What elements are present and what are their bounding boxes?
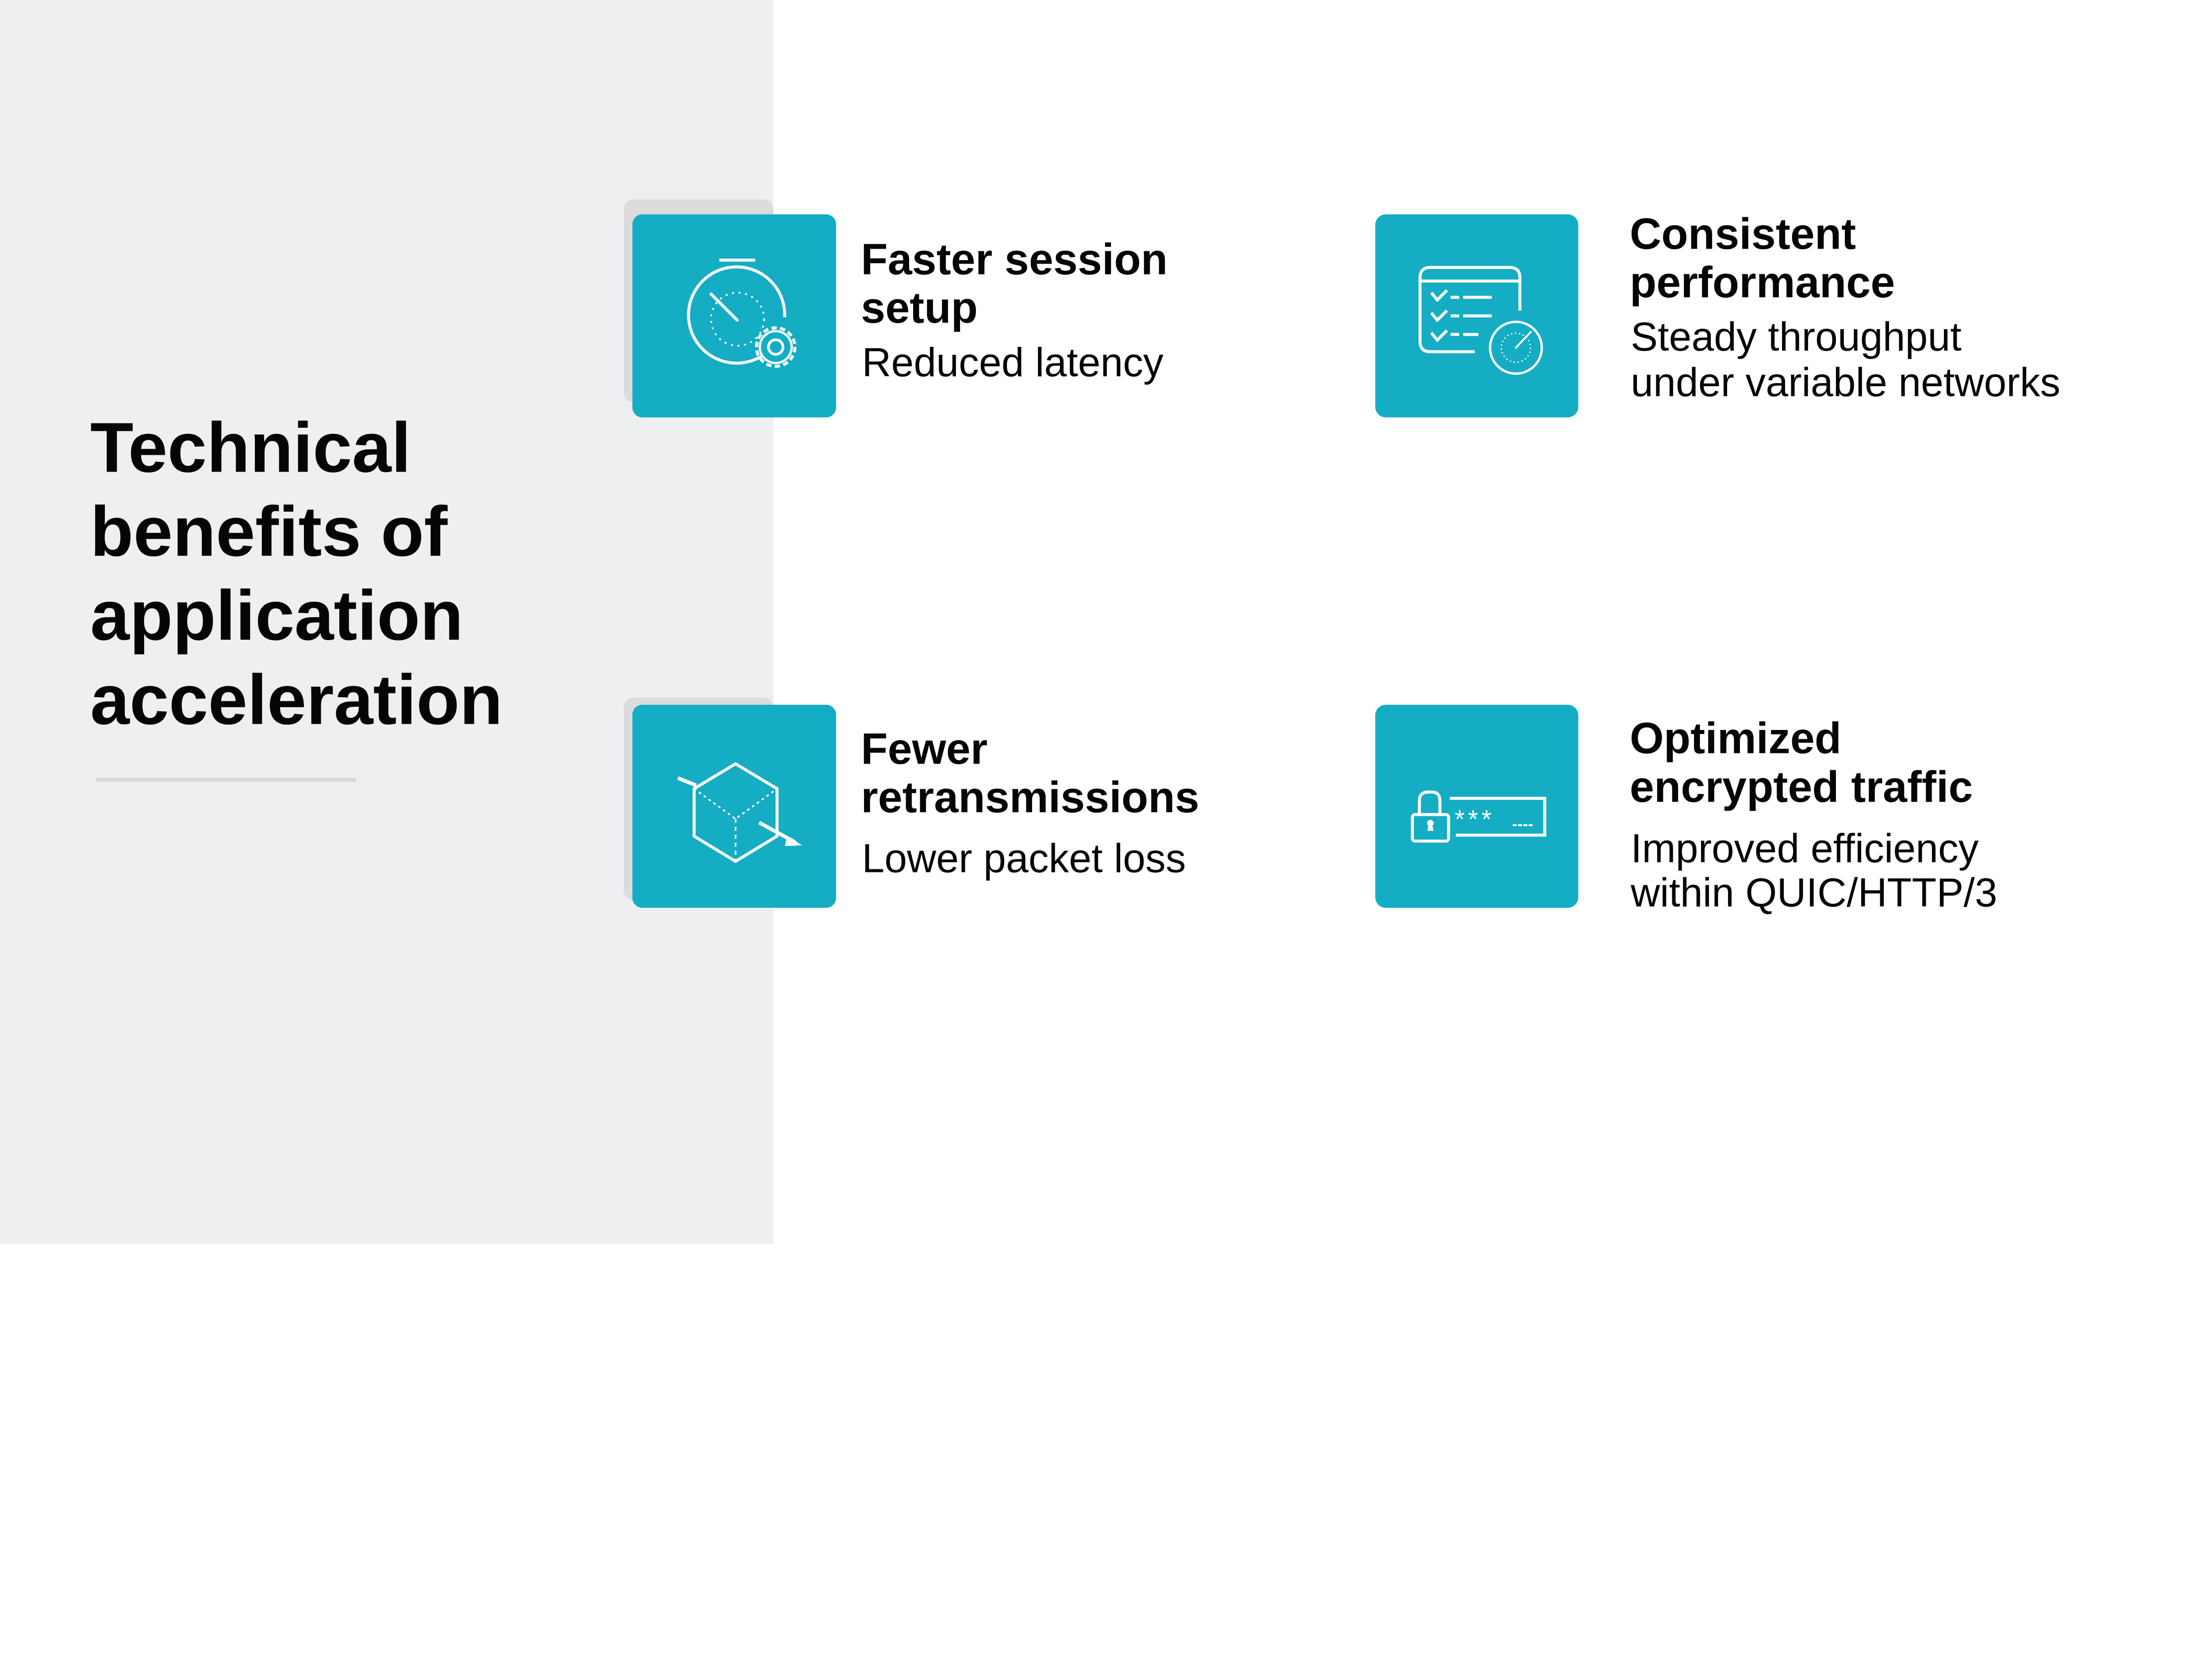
icon box: lock with password: ***	[1455, 805, 1495, 834]
card: optimized encrypted traffic	[1375, 705, 1997, 915]
heading and text: Improved efficiency	[1631, 826, 1979, 871]
heading and text	[1630, 209, 2060, 405]
icon box: checklist with gauge	[1375, 214, 1578, 418]
title: acceleration	[90, 660, 503, 739]
icon box: cube with arrow	[632, 705, 836, 908]
heading and text: Reduced latency	[862, 340, 1164, 385]
icon box: lock with password	[1375, 705, 1578, 908]
heading and text: Fewer	[861, 724, 987, 773]
icon box: stopwatch	[632, 214, 836, 418]
heading and text: Consistent	[1630, 209, 1856, 258]
title: benefits of	[90, 492, 448, 571]
title: application	[90, 576, 463, 655]
shadow 1	[624, 200, 773, 402]
heading and text	[861, 724, 1199, 881]
heading and text: Faster session	[861, 234, 1167, 284]
heading and text: Optimized	[1630, 713, 1841, 763]
title: Technical	[90, 407, 411, 487]
heading and text: retransmissions	[861, 772, 1199, 822]
shadow 3	[624, 697, 773, 900]
heading and text: Steady throughput	[1631, 315, 1962, 360]
heading and text: within QUIC/HTTP/3	[1630, 870, 1997, 915]
left panel background	[0, 0, 773, 1244]
heading and text: performance	[1630, 257, 1895, 307]
card: consistent performance	[1375, 209, 2060, 418]
heading and text: under variable networks	[1631, 360, 2060, 405]
heading and text	[1630, 713, 1997, 915]
heading and text	[861, 234, 1167, 385]
heading and text: setup	[861, 283, 978, 332]
title	[90, 407, 503, 739]
card: fewer retransmissions	[624, 697, 1199, 908]
heading and text: Lower packet loss	[862, 836, 1186, 881]
heading and text: encrypted traffic	[1630, 762, 1973, 811]
card: faster session setup	[624, 200, 1167, 418]
